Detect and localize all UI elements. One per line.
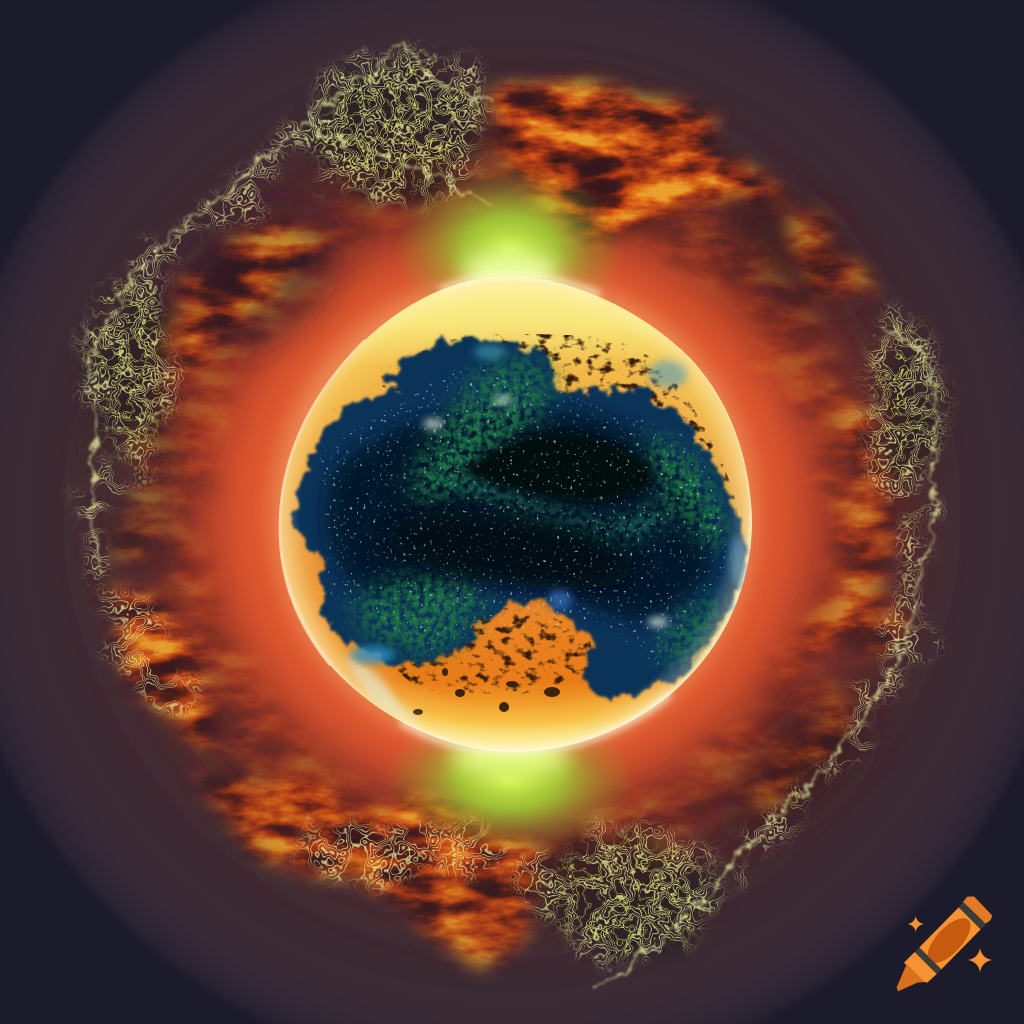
- panel: bright burst cores: [450, 252, 570, 775]
- bright blue accents: [350, 344, 746, 664]
- crayon upper band: [959, 902, 986, 929]
- planet bright edge: [280, 276, 670, 752]
- pale south-west shore: [345, 655, 420, 725]
- green landmass southeast: [660, 595, 730, 672]
- dark pockets in the corona: [105, 171, 885, 851]
- green landmass east: [640, 439, 728, 547]
- right flames: [810, 380, 895, 672]
- crayon lower band: [915, 947, 941, 974]
- crayon collar: [904, 952, 937, 983]
- planet base: [270, 270, 760, 760]
- ocean: [293, 339, 747, 698]
- south land craters: [413, 668, 560, 715]
- dark lens: [462, 432, 652, 502]
- left flames: [175, 236, 340, 360]
- lace: secondary veins: [94, 62, 935, 955]
- panel: lace ring: [85, 36, 937, 985]
- top right flames: [490, 87, 770, 235]
- sparkle small: [908, 916, 924, 932]
- inner yellow glow: [274, 274, 754, 754]
- green ribbon: [460, 475, 668, 534]
- bottom flames: [195, 774, 530, 954]
- land blotches along the coast: [360, 334, 739, 695]
- ocean speckle: [320, 360, 735, 670]
- crayon oval: [920, 911, 978, 970]
- lace: primary veins: [85, 52, 934, 963]
- clouds: [423, 396, 668, 627]
- green landmass north: [410, 357, 555, 502]
- panel: dark lace shadows: [97, 65, 935, 955]
- crayon body: [919, 907, 981, 969]
- faint streaks across the outer corona: [177, 180, 847, 850]
- panel: red-orange corona around the planet: [105, 120, 912, 910]
- crayon tip: [897, 964, 925, 991]
- panel: fiery clouds: [100, 87, 895, 954]
- planet rim light: [274, 274, 754, 754]
- panel: planet: [270, 270, 760, 760]
- icon: crayon logo with sparkles: [897, 896, 992, 991]
- panel: green light bursts: [385, 165, 635, 852]
- planet glow halo: [272, 272, 756, 756]
- crayon cap: [963, 896, 992, 924]
- sparkle large: [968, 948, 992, 972]
- dark core: [381, 497, 639, 603]
- lace outline: [91, 36, 937, 985]
- green landmass south: [350, 575, 485, 655]
- deep ocean: [327, 410, 712, 619]
